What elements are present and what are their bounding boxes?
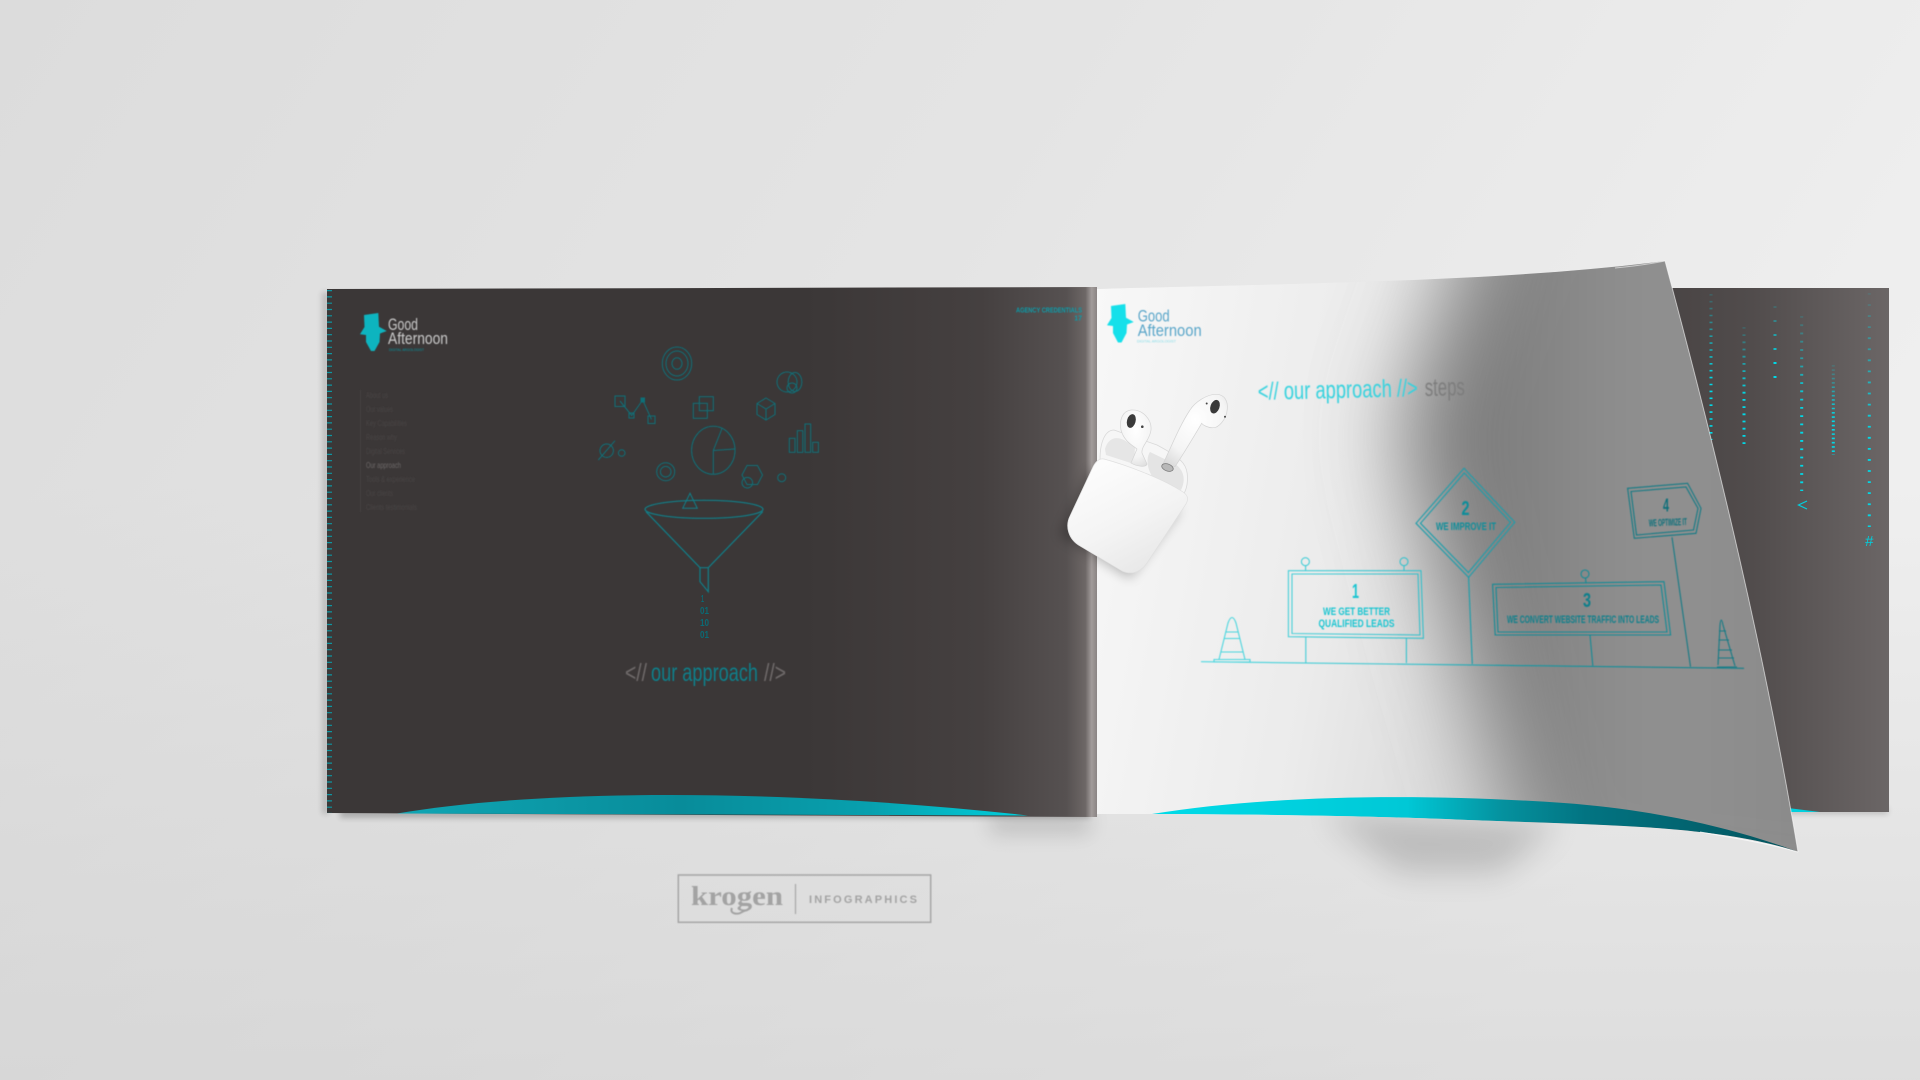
sign 4 arrow: 4: [1663, 496, 1669, 516]
airpods with case: [1060, 394, 1227, 578]
icon: bar chart: [789, 424, 818, 452]
icon cluster: analytics symbols: [598, 347, 818, 488]
krogen infographics badge: [678, 875, 931, 922]
icon: cube: [757, 398, 775, 420]
case body: [1068, 459, 1188, 573]
heading: our approach: our approach: [651, 659, 758, 687]
binary digits: 10: [700, 618, 709, 629]
panel: back page on the right with dot columns: [1640, 288, 1889, 812]
case shadow: [1060, 470, 1180, 578]
binary digits: [700, 594, 709, 641]
page curl shadow: [1348, 261, 1798, 852]
right earbud: [1161, 394, 1227, 473]
icon: line chart: [615, 396, 655, 424]
wordmark: krogen: krogen: [691, 881, 783, 911]
icon: overlapping squares: [693, 397, 713, 418]
sign 3: [1493, 570, 1671, 666]
sign 3: 3: [1583, 590, 1591, 612]
icon: target: [662, 347, 692, 380]
code glyph: hash: #: [1865, 533, 1874, 550]
page header: [1016, 308, 1082, 322]
wordmark: infographics: INFOGRAPHICS: [809, 894, 917, 906]
logo: Good Afternoon (dark page): DIGITAL ARGOLOGIST: [389, 347, 424, 352]
sign 1: 1: [1352, 581, 1359, 603]
logo: Good Afternoon (light page): [1107, 304, 1202, 344]
heading: our approach steps: steps: [1424, 373, 1465, 402]
sign 4 arrow: [1628, 483, 1701, 667]
case tray: [1100, 430, 1188, 495]
teal wave, left page: [397, 795, 1028, 816]
sign 1: QUALIFIED LEADS: [1318, 618, 1394, 630]
binary digits: 01: [700, 606, 709, 617]
logo: Good Afternoon (dark page): Afternoon: [388, 329, 448, 348]
ground line: [1201, 662, 1744, 668]
dot columns: [1711, 293, 1869, 527]
sign 3: WE CONVERT WEBSITE TRAFFIC INTO LEADS: [1507, 614, 1659, 626]
logo: Good Afternoon (light page): Good: [1138, 307, 1170, 326]
icon: donut: [657, 463, 675, 481]
side navigation menu: Clients testimonials: [366, 502, 417, 512]
code glyph: less-than: [1798, 501, 1807, 509]
sign 1: WE GET BETTER: [1323, 606, 1390, 618]
icon: empty set: [598, 441, 625, 460]
heading: our approach: //>: [764, 659, 786, 687]
shadows under brochure: [322, 292, 1888, 872]
side navigation menu: About us: [366, 390, 388, 400]
logo: Good Afternoon (dark page): Good: [388, 315, 418, 334]
side navigation menu: Our clients: [366, 488, 393, 498]
sign 1: [1288, 558, 1423, 663]
side navigation menu: Our values: [366, 404, 393, 414]
logo: Good Afternoon (light page): Afternoon: [1138, 321, 1202, 340]
ruler ticks on left edge: [327, 290, 332, 813]
panel: left page dark: [327, 287, 1097, 817]
icon: venn circles: [777, 372, 802, 393]
panel: right page curling: [1097, 261, 1798, 852]
sign 2 diamond: [1416, 468, 1515, 664]
icon: traffic cone left: [1214, 618, 1250, 662]
side navigation menu: [360, 390, 417, 512]
sign 4 arrow: WE OPTIMIZE IT: [1649, 517, 1687, 529]
heading: our approach: <//: [625, 659, 647, 687]
logo: Good Afternoon (light page): DIGITAL ARGOLOGIST: [1137, 338, 1177, 344]
binary digits: 1: [701, 594, 704, 605]
page header: 17: [1074, 316, 1082, 322]
side navigation menu: Digital Services: [366, 446, 405, 456]
heading: our approach steps: <// our approach //>: [1258, 374, 1418, 406]
side navigation menu: Key Capabilities: [366, 418, 407, 428]
side navigation menu: Reason why: [366, 432, 397, 442]
page header: AGENCY CREDENTIALS: [1016, 308, 1082, 314]
swirl under the g: [731, 908, 749, 914]
page edge highlight: [1615, 261, 1798, 852]
road diagram: [1201, 468, 1744, 668]
left earbud: [1120, 410, 1151, 466]
icon: pie chart: [692, 426, 735, 474]
teal wave, right page: [1152, 797, 1798, 852]
sign 2 diamond: WE IMPROVE IT: [1436, 521, 1496, 533]
logo: Good Afternoon (dark page): [360, 313, 448, 352]
sign 2 diamond: 2: [1462, 498, 1470, 520]
side navigation menu: Our approach: [366, 460, 401, 470]
icon: traffic cone right: [1717, 620, 1737, 667]
binary digits: 01: [700, 630, 709, 641]
icon: hexagon and circles: [742, 466, 786, 488]
side navigation menu: Tools & experience: [366, 474, 415, 484]
icon: funnel: [645, 493, 763, 592]
